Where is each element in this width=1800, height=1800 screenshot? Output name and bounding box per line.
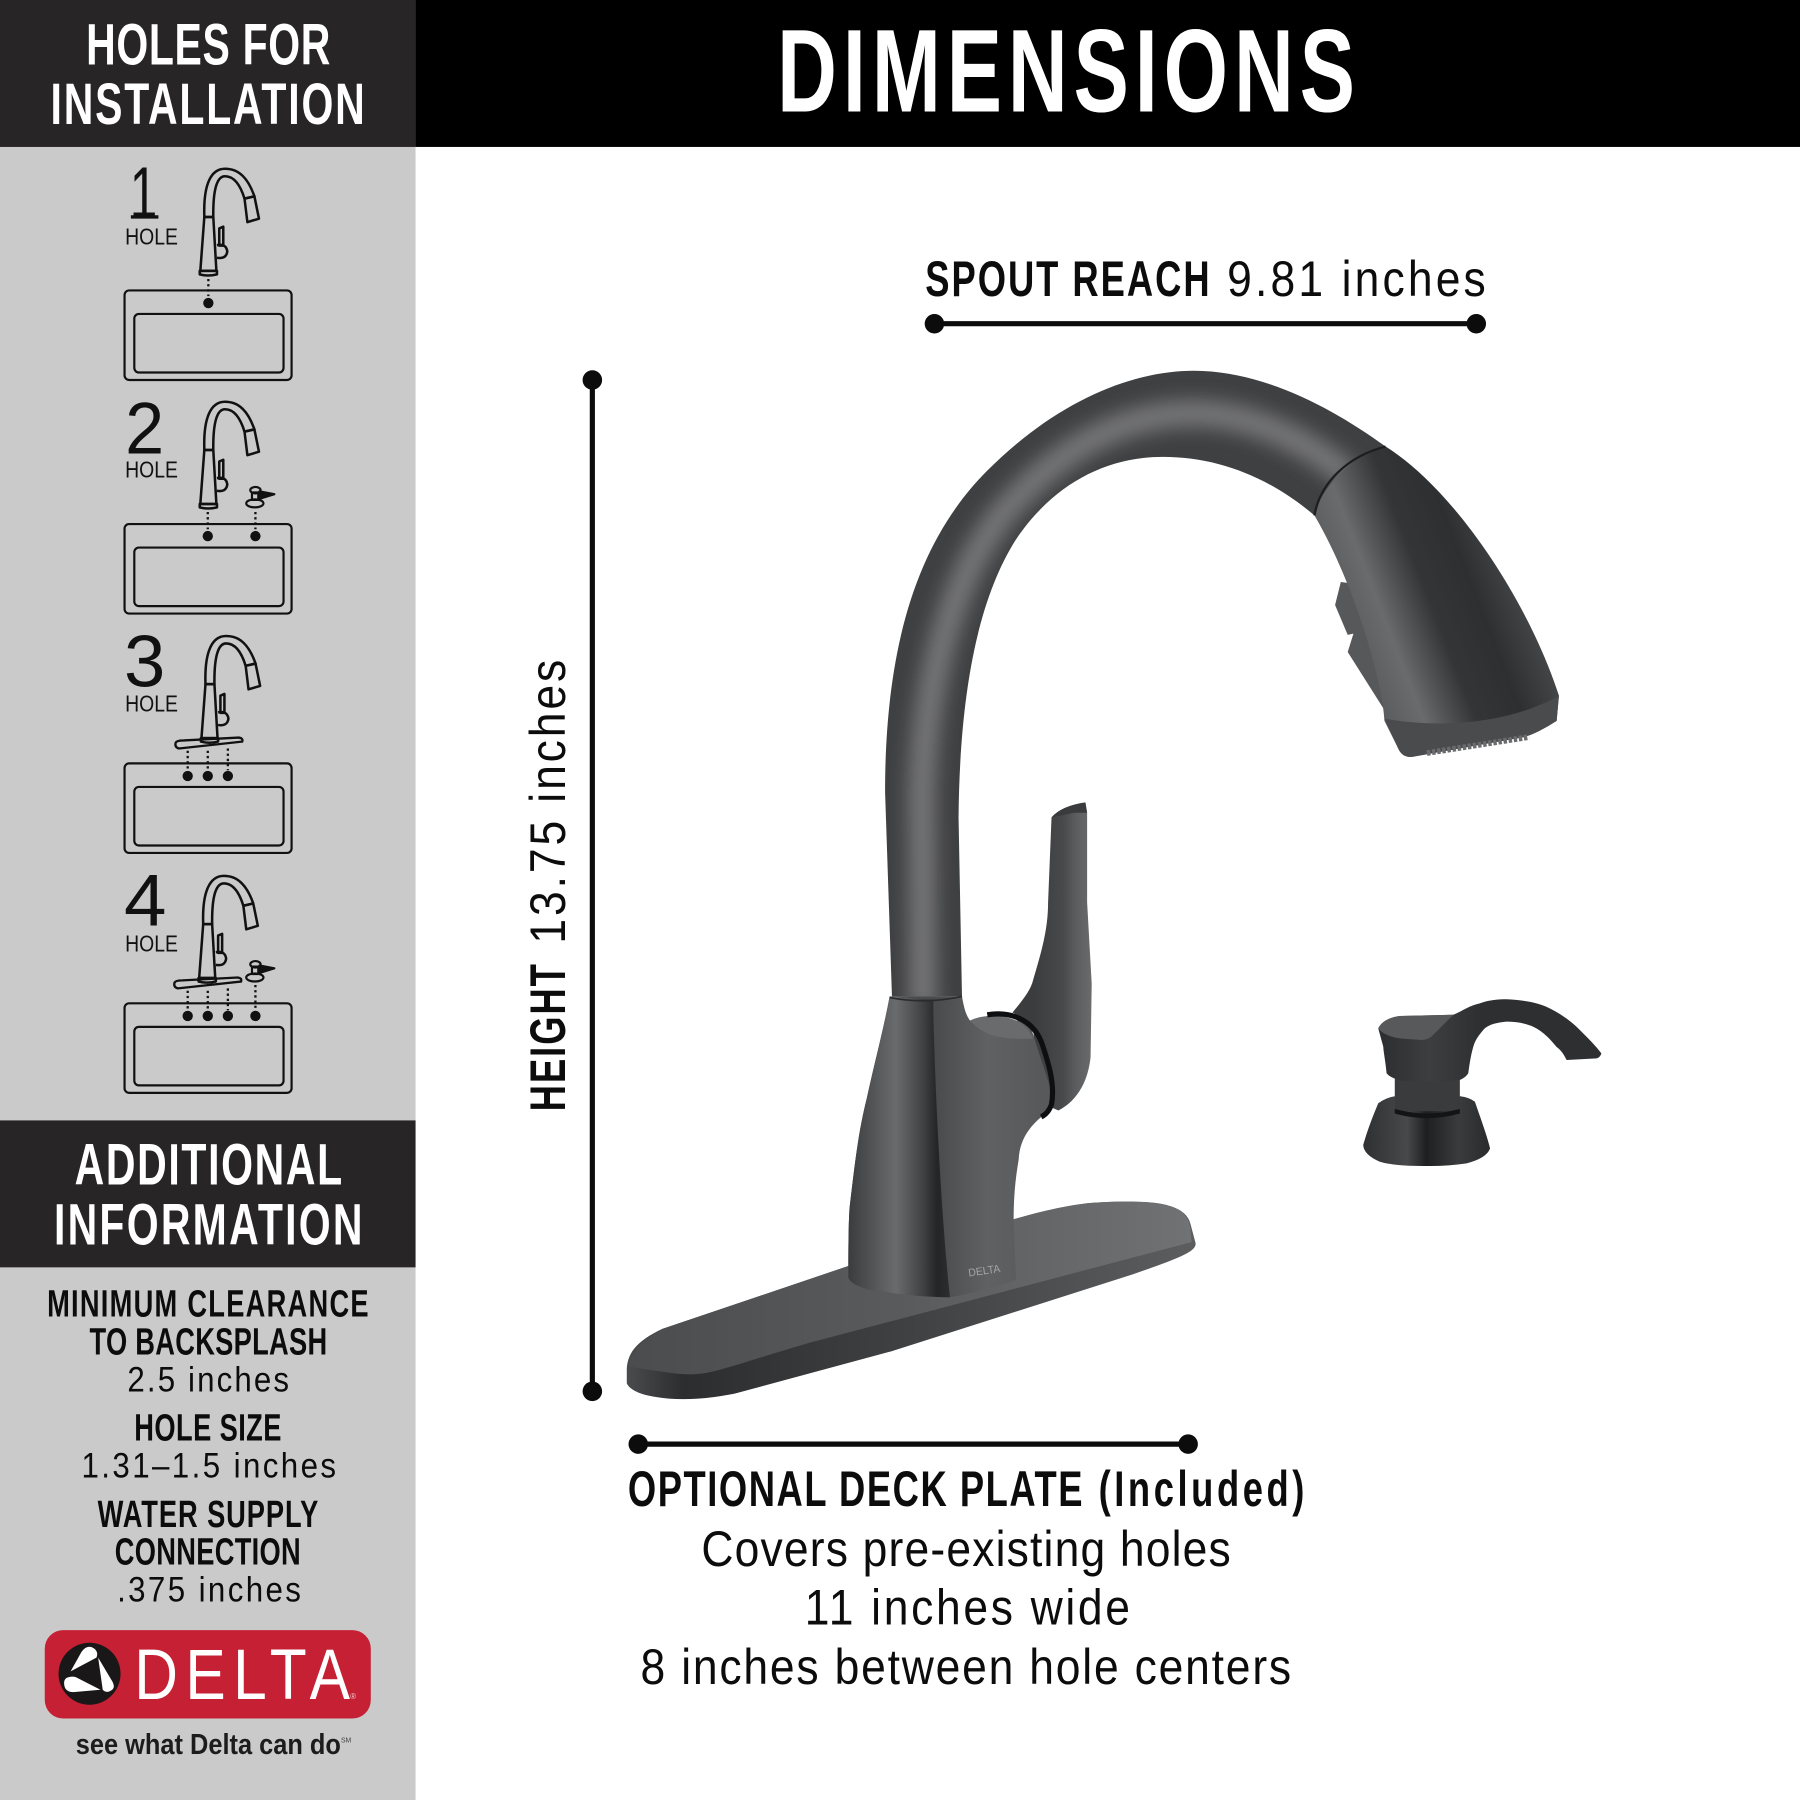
- soap dispenser photo: [1363, 999, 1601, 1166]
- icon: delta mark: [59, 1643, 121, 1705]
- dimension: optional deck plate: [628, 1434, 1304, 1696]
- installation option: 3 hole: 3: [124, 619, 165, 702]
- text block: minimum clearance: MINIMUM CLEARANCE: [47, 1282, 369, 1325]
- dimension: optional deck plate: 8 inches between hole centers: [641, 1639, 1291, 1696]
- wand head: [1314, 447, 1559, 757]
- installation option: 3 hole: [124, 619, 292, 853]
- handle: [1012, 802, 1092, 1111]
- header: holes for installation: INSTALLATION: [51, 71, 365, 137]
- installation option: 2 hole: HOLE: [125, 457, 178, 483]
- header: additional information: ADDITIONAL: [75, 1131, 342, 1197]
- text block: hole size: HOLE SIZE: [134, 1406, 281, 1449]
- dimension: optional deck plate: 11 inches wide: [805, 1580, 1130, 1636]
- spray button: [1335, 582, 1395, 708]
- dimension: height: [520, 370, 602, 1401]
- deck plate: [627, 1202, 1196, 1399]
- logo: delta: DELTA: [134, 1634, 350, 1714]
- dimension: height: HEIGHT: [520, 964, 576, 1111]
- text block: water supply connection: WATER SUPPLY: [98, 1492, 318, 1535]
- faucet body: DELTA: [968, 1263, 1002, 1280]
- installation option: 4 hole: [124, 858, 292, 1093]
- dimension: spout reach: SPOUT REACH: [925, 251, 1210, 308]
- tagline: see what Delta can do: [76, 1729, 341, 1761]
- installation option: 1 hole: HOLE: [125, 224, 178, 250]
- installation option: 1 hole: 1: [130, 151, 157, 234]
- dimension: height: 13.75 inches: [520, 660, 576, 944]
- header: additional information: [0, 1120, 416, 1267]
- installation option: 2 hole: 2: [125, 386, 164, 469]
- background panel: sidebar: [0, 0, 416, 1800]
- installation option: 3 hole: HOLE: [125, 691, 178, 717]
- installation option: 1 hole: [125, 151, 292, 380]
- text block: minimum clearance: TO BACKSPLASH: [90, 1320, 327, 1363]
- logo: delta: ®: [350, 1692, 356, 1701]
- tagline: SM: [341, 1738, 352, 1745]
- text block: hole size: [82, 1406, 336, 1486]
- header: dimensions: [416, 0, 1800, 147]
- text block: hole size: 1.31–1.5 inches: [82, 1447, 336, 1486]
- text block: minimum clearance: [47, 1282, 369, 1400]
- text block: water supply connection: .375 inches: [117, 1571, 301, 1610]
- text block: water supply connection: [98, 1492, 318, 1610]
- dimension: spout reach: 9.81 inches: [1227, 252, 1486, 308]
- text block: minimum clearance: 2.5 inches: [127, 1361, 289, 1400]
- installation option: 4 hole: 4: [124, 858, 166, 941]
- header: dimensions: DIMENSIONS: [777, 5, 1355, 137]
- dimension: optional deck plate: Covers pre-existing holes: [701, 1521, 1231, 1577]
- header: holes for installation: HOLES FOR: [86, 11, 330, 77]
- faucet photo: [627, 371, 1559, 1399]
- faucet body: [848, 996, 1054, 1297]
- dimension: optional deck plate: OPTIONAL DECK PLATE: [628, 1461, 1083, 1518]
- spout riser and arc: [885, 371, 1386, 1010]
- dimension: spout reach: [925, 251, 1486, 333]
- dimension: optional deck plate: (Included): [1099, 1461, 1304, 1518]
- installation option: 4 hole: HOLE: [125, 931, 178, 957]
- text block: water supply connection: CONNECTION: [115, 1530, 301, 1573]
- header: holes for installation: [0, 0, 416, 147]
- logo: delta: [45, 1630, 371, 1718]
- installation option: 2 hole: [125, 386, 292, 614]
- header: additional information: INFORMATION: [54, 1191, 363, 1257]
